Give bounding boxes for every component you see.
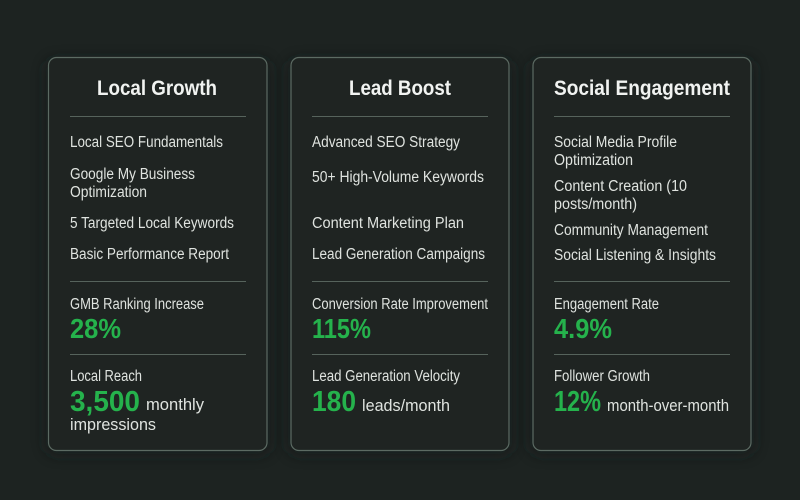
metric: Follower Growth: month-over-month [607, 396, 729, 415]
metric: GMB Ranking Increase: 28% [70, 313, 121, 344]
feature list: Social Engagement: Social Listening & Insights [554, 247, 716, 264]
feature list: Local Growth: 5 Targeted Local Keywords [70, 215, 234, 232]
feature list: Lead Boost: Content Marketing Plan [312, 215, 464, 232]
metric: Local Reach: Local Reach [70, 368, 142, 385]
metric: Local Reach [70, 368, 204, 434]
feature list: Social Engagement: Social Media Profile [554, 134, 677, 151]
panel: Lead Boost [291, 58, 509, 450]
heading: Social Engagement: Social Engagement [554, 77, 730, 100]
metric: Local Reach: 3,500 [70, 386, 140, 418]
panel: Local Growth [48, 58, 267, 450]
feature list: Local Growth: Local SEO Fundamentals [70, 134, 223, 151]
metric: GMB Ranking Increase [70, 296, 204, 344]
metric: Follower Growth [554, 368, 729, 418]
metric: Local Reach: monthly [146, 395, 204, 414]
feature list: Social Engagement [554, 134, 716, 264]
feature list: Lead Boost: Advanced SEO Strategy [312, 134, 460, 151]
metric: Conversion Rate Improvement [312, 296, 489, 344]
panel: Social Engagement [533, 58, 751, 450]
heading: Lead Boost: Lead Boost [349, 77, 451, 100]
metric: Lead Generation Velocity: leads/month [362, 396, 450, 415]
metric: Follower Growth: 12% [554, 386, 601, 418]
feature list: Local Growth: Optimization [70, 184, 147, 201]
feature list: Local Growth: Google My Business [70, 166, 195, 183]
metric: Conversion Rate Improvement: Conversion Rate Improvement [312, 296, 489, 313]
feature list: Social Engagement: Community Management [554, 222, 709, 239]
metric: Engagement Rate: Engagement Rate [554, 296, 659, 313]
metric: Local Reach: impressions [70, 415, 156, 434]
metric: Lead Generation Velocity: 180 [312, 386, 356, 418]
feature list: Lead Boost [312, 134, 485, 263]
heading: Local Growth: Local Growth [97, 77, 217, 100]
feature list: Local Growth [70, 134, 234, 263]
metric: Engagement Rate: 4.9% [554, 313, 612, 344]
metric: GMB Ranking Increase: GMB Ranking Increase [70, 296, 204, 313]
metric: Follower Growth: Follower Growth [554, 368, 650, 385]
feature list: Lead Boost: 50+ High-Volume Keywords [312, 169, 484, 186]
metric: Conversion Rate Improvement: 115% [312, 313, 371, 344]
feature list: Lead Boost: Lead Generation Campaigns [312, 246, 485, 263]
feature list: Local Growth: Basic Performance Report [70, 246, 230, 263]
metric: Engagement Rate [554, 296, 659, 344]
metric: Lead Generation Velocity [312, 368, 460, 418]
feature list: Social Engagement: posts/month) [554, 196, 637, 213]
metric: Lead Generation Velocity: Lead Generation Velocity [312, 368, 460, 385]
feature list: Social Engagement: Optimization [554, 152, 633, 169]
feature list: Social Engagement: Content Creation (10 [554, 178, 687, 195]
